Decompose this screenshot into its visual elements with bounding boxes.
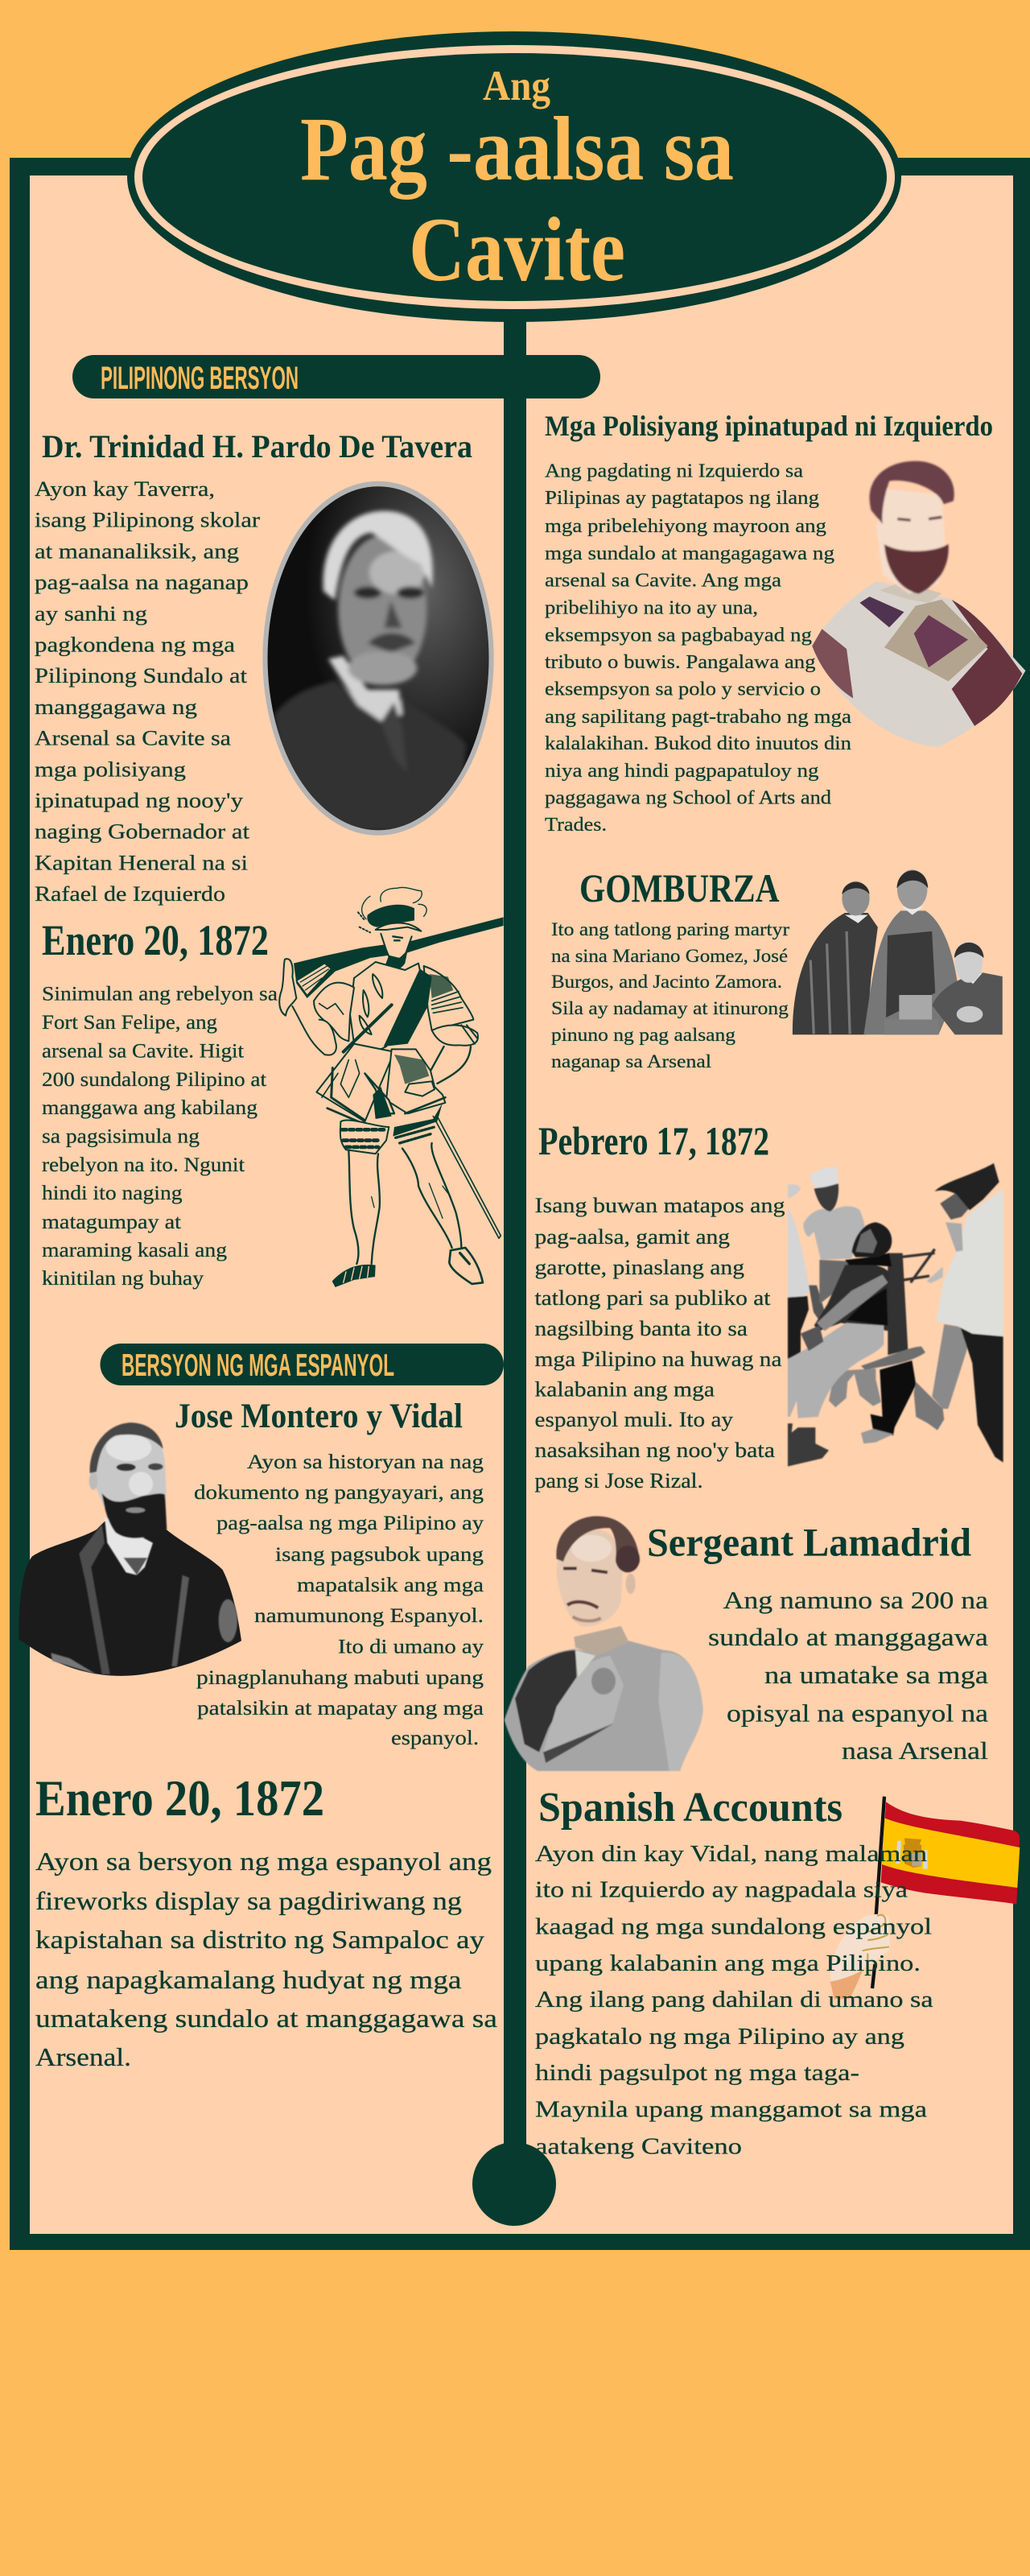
title: Pag-aalsa sa: Pag -aalsa sa <box>300 99 734 200</box>
text block: Izquierdo policies <box>545 461 851 836</box>
text block: Tavera account: Rafael de Izquierdo <box>35 882 225 906</box>
text block: GOMBURZA description: naganap sa Arsenal <box>551 1051 711 1071</box>
text block: Spanish accounts narrative: kaagad ng mga sundalong espanyol <box>535 1914 932 1940</box>
section pill: Pilipinong Bersyon: PILIPINONG BERSYON <box>101 361 299 396</box>
text block: Spanish accounts narrative: Ayon din kay Vidal, nang malaman <box>535 1841 928 1867</box>
text block: Tavera account: Pilipinong Sundalo at <box>35 664 248 687</box>
text block: Izquierdo policies: eksempsyon sa pagbabayad ng <box>545 625 812 646</box>
text block: rebellion narrative <box>42 983 278 1290</box>
text block: Tavera account: mga polisiyang <box>35 758 186 781</box>
text block: GOMBURZA description: Burgos, and Jacinto Zamora. <box>551 972 782 992</box>
timeline spine <box>504 306 526 2190</box>
text block: Izquierdo policies: Trades. <box>545 815 607 836</box>
text block: fireworks account: ang napagkamalang hudyat ng mga <box>35 1965 462 1994</box>
text block: Montero y Vidal account: espanyol. <box>391 1728 479 1749</box>
text block: Izquierdo policies: ang sapilitang pagt-trabaho ng mga <box>545 707 851 728</box>
section pill: Pilipinong Bersyon <box>72 355 600 398</box>
text block: Tavera account: ipinatupad ng nooy'y <box>35 789 243 812</box>
text block: execution narrative: pang si Jose Rizal. <box>534 1469 703 1492</box>
text block: Tavera account: pagkondena ng mga <box>35 633 236 657</box>
text block: Tavera account: at mananaliksik, ang <box>35 539 239 563</box>
text block: Izquierdo policies: Pilipinas ay pagtatapos ng ilang <box>545 488 819 509</box>
text block: Montero y Vidal account: dokumento ng pangyayari, ang <box>194 1482 484 1504</box>
text block: Montero y Vidal account: Ito di umano ay <box>338 1636 484 1658</box>
text block: execution narrative: pag-aalsa, gamit ang <box>534 1225 730 1249</box>
text block: GOMBURZA description <box>551 919 789 1071</box>
text block: Montero y Vidal account: isang pagsubok upang <box>275 1544 484 1566</box>
text block: Izquierdo policies: tributo o buwis. Pangalawa ang <box>545 652 816 673</box>
section pill: Bersyon ng mga Espanyol: BERSYON NG MGA ESPANYOL <box>122 1348 394 1383</box>
photo: three priests <box>793 869 1003 1034</box>
text block: execution narrative: nasaksihan ng noo'y bata <box>534 1439 776 1462</box>
text block: GOMBURZA description: Ito ang tatlong paring martyr <box>551 919 789 939</box>
text block: fireworks account: umatakeng sundalo at manggagawa sa <box>35 2004 497 2033</box>
text block: Tavera account: Arsenal sa Cavite sa <box>35 727 232 750</box>
text block: execution narrative: espanyol muli. Ito ay <box>534 1408 733 1431</box>
text block: Lamadrid description: Ang namuno sa 200 na <box>723 1586 988 1614</box>
portrait: Jose Montero y Vidal <box>19 1422 241 1676</box>
portrait: Pardo de Tavera oval <box>262 481 494 836</box>
heading: Pebrero 17, 1872: Pebrero 17, 1872 <box>538 1118 769 1163</box>
text block: rebellion narrative: Sinimulan ang rebelyon sa <box>42 983 278 1005</box>
text block: Tavera account <box>35 477 260 906</box>
text block: Spanish accounts narrative: ito ni Izquierdo ay nagpadala siya <box>535 1877 908 1903</box>
text block: rebellion narrative: arsenal sa Cavite. Higit <box>42 1040 244 1063</box>
text block: execution narrative <box>534 1194 785 1492</box>
text block: Izquierdo policies: niya ang hindi pagpapatuloy ng <box>545 761 819 782</box>
text block: rebellion narrative: hindi ito naging <box>42 1183 183 1204</box>
text block: Lamadrid description: opisyal na espanyol na <box>727 1699 988 1728</box>
text block: rebellion narrative: kinitilan ng buhay <box>42 1268 204 1290</box>
text block: rebellion narrative: rebelyon na ito. Ngunit <box>42 1154 245 1176</box>
text block: Spanish accounts narrative: Maynila upang manggamot sa mga <box>535 2096 927 2122</box>
timeline end circle <box>472 2142 556 2226</box>
text block: Spanish accounts narrative: pagkatalo ng mga Pilipino ay ang <box>535 2024 904 2050</box>
text block: Izquierdo policies: arsenal sa Cavite. Ang mga <box>545 570 781 591</box>
text block: execution narrative: Isang buwan matapos ang <box>534 1194 785 1217</box>
text block: execution narrative: kalabanin ang mga <box>534 1378 715 1401</box>
heading: Enero 20, 1872 (Filipino version): Enero 20, 1872 <box>42 916 269 964</box>
title: Cavite: Cavite <box>409 200 625 300</box>
heading: Mga Polisiyang ipinatupad ni Izquierdo: Mga Polisiyang ipinatupad ni Izquierdo <box>545 410 993 442</box>
heading: Dr. Trinidad H. Pardo De Tavera: Dr. Trinidad H. Pardo De Tavera <box>42 428 472 464</box>
text block: Lamadrid description: sundalo at manggagawa <box>708 1623 988 1651</box>
text block: GOMBURZA description: Sila ay nadamay at itinurong <box>551 998 789 1018</box>
heading: Spanish Accounts: Spanish Accounts <box>538 1785 843 1831</box>
text block: Tavera account: Ayon kay Taverra, <box>35 477 215 501</box>
text block: Montero y Vidal account: namumunong Espanyol. <box>254 1605 484 1627</box>
text block: rebellion narrative: Fort San Felipe, ang <box>42 1012 218 1034</box>
text block: Izquierdo policies: paggagawa ng School of Arts and <box>545 788 831 809</box>
text block: Izquierdo policies: kalalakihan. Bukod dito inuutos din <box>545 733 851 754</box>
text block: Tavera account: pag-aalsa na naganap <box>35 571 249 594</box>
text block: rebellion narrative: maraming kasali ang <box>42 1240 228 1261</box>
section pill: Bersyon ng mga Espanyol <box>100 1344 504 1385</box>
heading: Jose Montero y Vidal: Jose Montero y Vidal <box>175 1397 463 1435</box>
text block: Izquierdo policies: pribelihiyo na ito ay una, <box>545 597 758 618</box>
text block: Montero y Vidal account: pinagplanuhang mabuti upang <box>196 1667 484 1689</box>
heading: Enero 20, 1872 (Spanish version): Enero 20, 1872 <box>35 1769 324 1827</box>
text block: Montero y Vidal account: mapatalsik ang mga <box>297 1575 484 1596</box>
text block: Montero y Vidal account <box>194 1451 484 1749</box>
text block: Tavera account: naging Gobernador at <box>35 820 250 844</box>
text block: Tavera account: Kapitan Heneral na si <box>35 851 248 874</box>
text block: Izquierdo policies: mga sundalo at mangagagawa ng <box>545 543 834 564</box>
text block: Spanish accounts narrative: upang kalabanin ang mga Pilipino. <box>535 1951 921 1976</box>
text block: fireworks account <box>35 1847 497 2071</box>
text block: Lamadrid description: nasa Arsenal <box>842 1736 988 1765</box>
text block: execution narrative: garotte, pinaslang ang <box>534 1256 744 1279</box>
content panel <box>30 175 1013 2234</box>
text block: fireworks account: Arsenal. <box>35 2042 131 2071</box>
text block: Lamadrid description: na umatake sa mga <box>764 1661 988 1689</box>
text block: rebellion narrative: manggawa ang kabilang <box>42 1097 258 1119</box>
text block: Lamadrid description <box>708 1586 988 1765</box>
title oval <box>127 31 901 322</box>
text block: fireworks account: fireworks display sa pagdiriwang ng <box>35 1886 462 1915</box>
photo: garrote execution <box>788 1163 1003 1467</box>
text block: execution narrative: mga Pilipino na huwag na <box>534 1348 782 1371</box>
portrait: Sergeant Lamadrid <box>505 1516 702 1771</box>
text block: Montero y Vidal account: pag-aalsa ng mga Pilipino ay <box>216 1513 484 1534</box>
text block: rebellion narrative: 200 sundalong Pilipino at <box>42 1069 266 1091</box>
text block: rebellion narrative: matagumpay at <box>42 1212 181 1233</box>
illustration: soldier with musket <box>279 887 504 1287</box>
text block: Tavera account: manggagawa ng <box>35 696 197 719</box>
text block: GOMBURZA description: na sina Mariano Gomez, José <box>551 946 788 966</box>
text block: Spanish accounts narrative <box>535 1841 933 2159</box>
portrait: Izquierdo <box>812 461 1025 747</box>
text block: rebellion narrative: sa pagsisimula ng <box>42 1126 200 1148</box>
text block: fireworks account: kapistahan sa distrito ng Sampaloc ay <box>35 1925 484 1954</box>
icon: hand holding Spanish flag <box>830 1797 1020 1999</box>
text block: execution narrative: tatlong pari sa publiko at <box>534 1286 771 1310</box>
heading: GOMBURZA: GOMBURZA <box>579 865 780 910</box>
text block: fireworks account: Ayon sa bersyon ng mga espanyol ang <box>35 1847 492 1876</box>
text block: Montero y Vidal account: patalsikin at mapatay ang mga <box>197 1698 484 1719</box>
title: Ang: Ang <box>483 63 550 109</box>
text block: GOMBURZA description: pinuno ng pag aalsang <box>551 1025 736 1045</box>
heading: Sergeant Lamadrid: Sergeant Lamadrid <box>647 1520 971 1565</box>
text block: Spanish accounts narrative: hindi pagsulpot ng mga taga- <box>535 2060 859 2086</box>
text block: Izquierdo policies: mga pribelehiyong mayroon ang <box>545 516 826 537</box>
text block: Izquierdo policies: Ang pagdating ni Izquierdo sa <box>545 461 803 482</box>
text block: Spanish accounts narrative: aatakeng Caviteno <box>535 2133 742 2159</box>
text block: Montero y Vidal account: Ayon sa historyan na nag <box>247 1451 484 1473</box>
text block: Izquierdo policies: eksempsyon sa polo y servicio o <box>545 679 821 700</box>
text block: execution narrative: nagsilbing banta ito sa <box>534 1317 748 1340</box>
text block: Spanish accounts narrative: Ang ilang pang dahilan di umano sa <box>535 1987 933 2013</box>
text block: Tavera account: ay sanhi ng <box>35 602 147 625</box>
text block: Tavera account: isang Pilipinong skolar <box>35 509 260 532</box>
